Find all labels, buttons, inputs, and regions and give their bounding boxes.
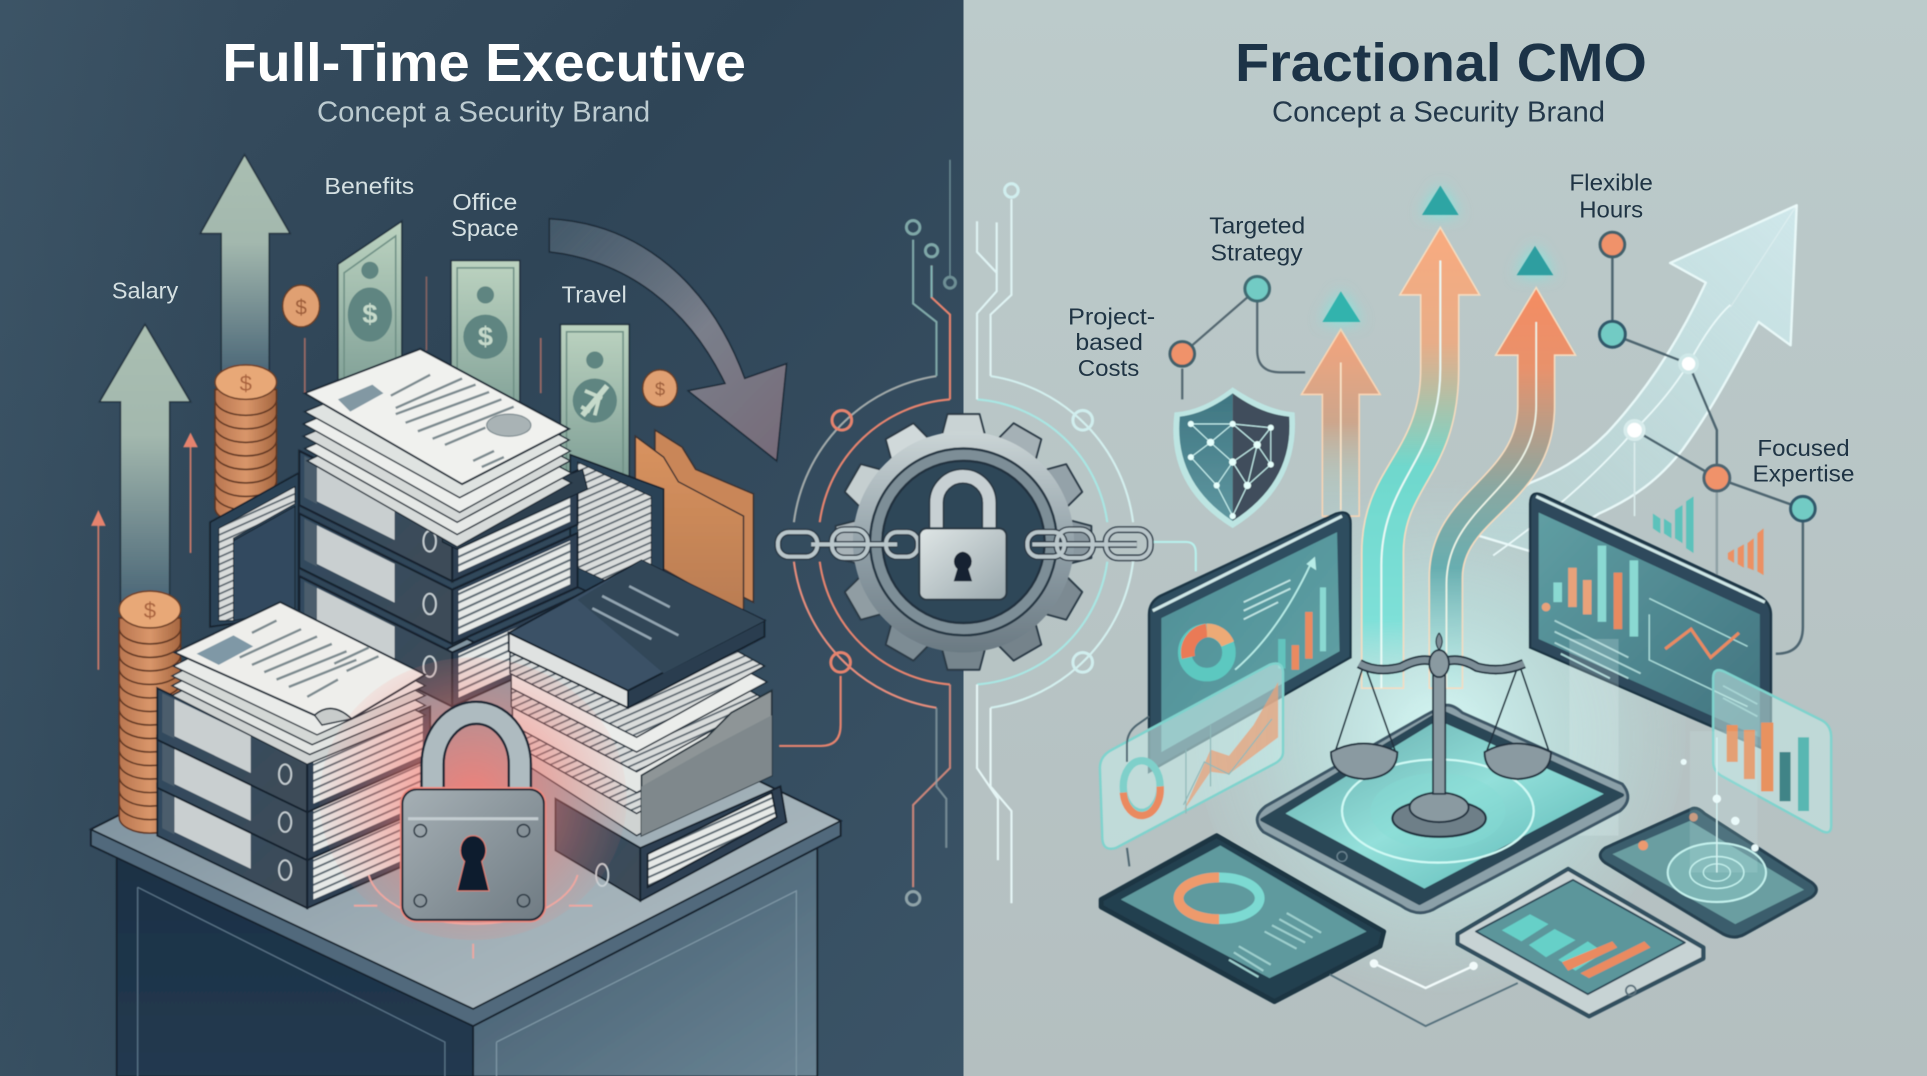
label: Flexible Hours [1569, 169, 1653, 223]
label: Targeted Strategy [1209, 212, 1305, 266]
label: Project-based Costs [1068, 303, 1155, 381]
icon: coin stack left: $ [144, 598, 156, 623]
panel: open binder behind [210, 455, 664, 627]
panel: left monitor [1149, 512, 1351, 772]
icon: loose coin right [643, 370, 677, 407]
paper stack central [304, 349, 571, 547]
connector: monitor link left [1127, 716, 1149, 866]
icon: coin stack left [119, 591, 181, 833]
label: Benefits: Benefits [324, 173, 414, 199]
panel: desk [91, 639, 841, 1076]
panel: central binder stack [299, 349, 587, 707]
glow: right central light [1195, 455, 1686, 995]
heading: Full-Time Executive: Full-Time Executive [222, 33, 746, 93]
icon: bill benefits: $ [362, 299, 377, 329]
connector: right circuit nodes [1005, 184, 1093, 672]
icon: coin stack tall [215, 365, 277, 523]
label: Travel: Travel [562, 281, 627, 307]
icon: target ring under padlock [354, 875, 592, 959]
icon: loose coin left: $ [295, 297, 307, 320]
icon: mini teal bars [1653, 496, 1693, 553]
arrow: thin orange arrows [91, 276, 616, 670]
panel: left glass overlay [1100, 664, 1283, 849]
label: Targeted Strategy: Strategy [1211, 240, 1303, 266]
heading: Fractional CMO: Fractional CMO [1235, 33, 1647, 93]
arrow: teal orange arrow A [1301, 329, 1380, 516]
glow: red halo behind lock [320, 657, 627, 940]
illustration: full artwork [91, 155, 1831, 1076]
icon: bill benefits [338, 221, 402, 393]
panel: right stack with book and folder [509, 560, 787, 901]
arrow: rising cost arrow tall [200, 155, 290, 375]
connector: left circuit nodes [831, 221, 956, 905]
connector: right network [1599, 232, 1815, 654]
panel: left background [0, 0, 964, 1076]
icon: bill travel [560, 324, 629, 478]
panel: right dark tablet [1600, 731, 1816, 937]
panel: right background [964, 0, 1927, 1076]
arrow: large translucent growth arrow [1462, 205, 1797, 555]
label: Flexible Hours: Hours [1579, 197, 1643, 223]
dark book [509, 560, 764, 708]
panel: right glass overlay [1713, 670, 1831, 832]
panel: right monitor [1530, 493, 1771, 836]
connector: left network [1170, 276, 1305, 399]
panel: bottom left tablet [1101, 836, 1384, 1002]
label: Salary: Salary [112, 278, 179, 304]
icon: central gear with padlock [778, 414, 1150, 670]
arrow: teal orange arrow C [1429, 288, 1576, 688]
subheading: right: Concept a Security Brand [1272, 96, 1605, 128]
icon: coin stack tall: $ [240, 371, 252, 396]
label: Office Space: Space [451, 215, 519, 241]
connector: left circuit lines [779, 160, 950, 887]
subheading: left: Concept a Security Brand [317, 96, 650, 128]
icon: red padlock [401, 713, 546, 922]
icon: orange folder [635, 430, 753, 614]
icon: scales of justice [1331, 633, 1551, 837]
label: Focused Expertise [1752, 435, 1854, 487]
arrow: rising cost arrow left [100, 324, 190, 602]
icon: glowing teal triangles [1322, 186, 1553, 322]
chain [778, 530, 1150, 558]
label: Focused Expertise: Focused [1757, 435, 1850, 461]
panel: bottom right tablet [1458, 869, 1703, 1016]
icon: loose coin left [283, 285, 320, 327]
label: Targeted Strategy: Targeted [1209, 212, 1305, 238]
panel: left binder stack [157, 602, 430, 908]
label: Flexible Hours: Flexible [1569, 169, 1653, 195]
connector: bottom device links [1330, 959, 1518, 1026]
icon: mini orange bars [1728, 528, 1764, 575]
label: Project-based Costs: Costs [1078, 355, 1139, 381]
label: Focused Expertise: Expertise [1752, 461, 1854, 487]
document text lines central [391, 375, 514, 467]
label: Office Space [451, 189, 519, 241]
connector: right circuit lines [977, 199, 1196, 903]
arrow: curved downward arrow [549, 219, 787, 461]
paper stack left [172, 602, 425, 764]
label: Office Space: Office [452, 189, 517, 215]
label: Project-based Costs: Project- [1068, 303, 1155, 329]
icon: network shield [1175, 390, 1293, 526]
label: Project-based Costs: based [1075, 329, 1143, 355]
arrow: teal orange arrow B [1362, 227, 1480, 688]
icon: bill office: $ [478, 321, 493, 351]
panel: center tablet [1257, 705, 1628, 913]
gray folder [642, 691, 772, 836]
icon: bill office [451, 261, 520, 420]
icon: loose coin right: $ [655, 379, 665, 400]
